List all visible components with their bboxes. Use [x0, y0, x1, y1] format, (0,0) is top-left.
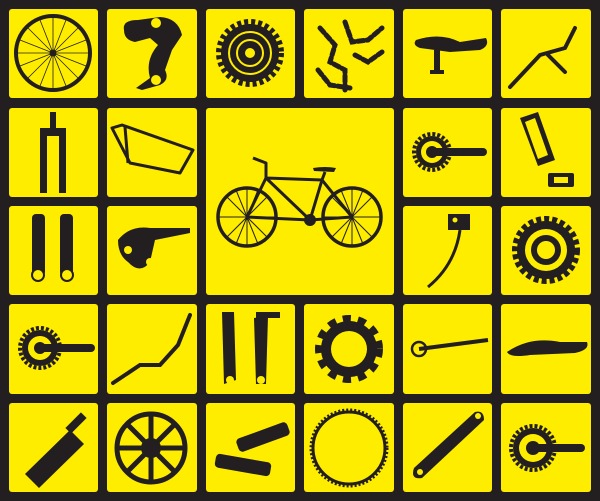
icon: tire — [311, 410, 387, 486]
icon: grips — [32, 214, 73, 281]
icon: rear derailleur — [124, 17, 182, 90]
icon: sprocket — [319, 319, 379, 379]
icon: handlebar 2 — [113, 315, 190, 383]
icon: chain guard — [412, 340, 488, 356]
icon: grips 2 — [214, 421, 291, 477]
icon: chainring — [515, 219, 577, 281]
icon: chain — [318, 22, 382, 90]
icon: crankset 2 — [20, 328, 95, 368]
icon: fork — [40, 112, 66, 193]
icon: wheel — [16, 16, 90, 90]
icon: frame — [112, 125, 193, 173]
icon: crank arm — [413, 412, 484, 478]
icon: v-brakes — [222, 312, 280, 384]
icon: shock absorber — [25, 412, 87, 488]
icon: crankset — [414, 134, 487, 170]
icon: saddle 2 — [507, 340, 588, 356]
icon: brake lever — [118, 228, 190, 268]
icon: bicycle — [218, 158, 381, 246]
icon: pedals — [520, 112, 574, 187]
icon: handlebar — [510, 28, 575, 87]
icon: crankset 3 — [511, 426, 585, 470]
icon: cassette — [219, 22, 281, 84]
icon: rear fender — [428, 214, 470, 287]
icon: saddle — [415, 36, 487, 74]
icon: chainring spoked — [117, 414, 185, 482]
